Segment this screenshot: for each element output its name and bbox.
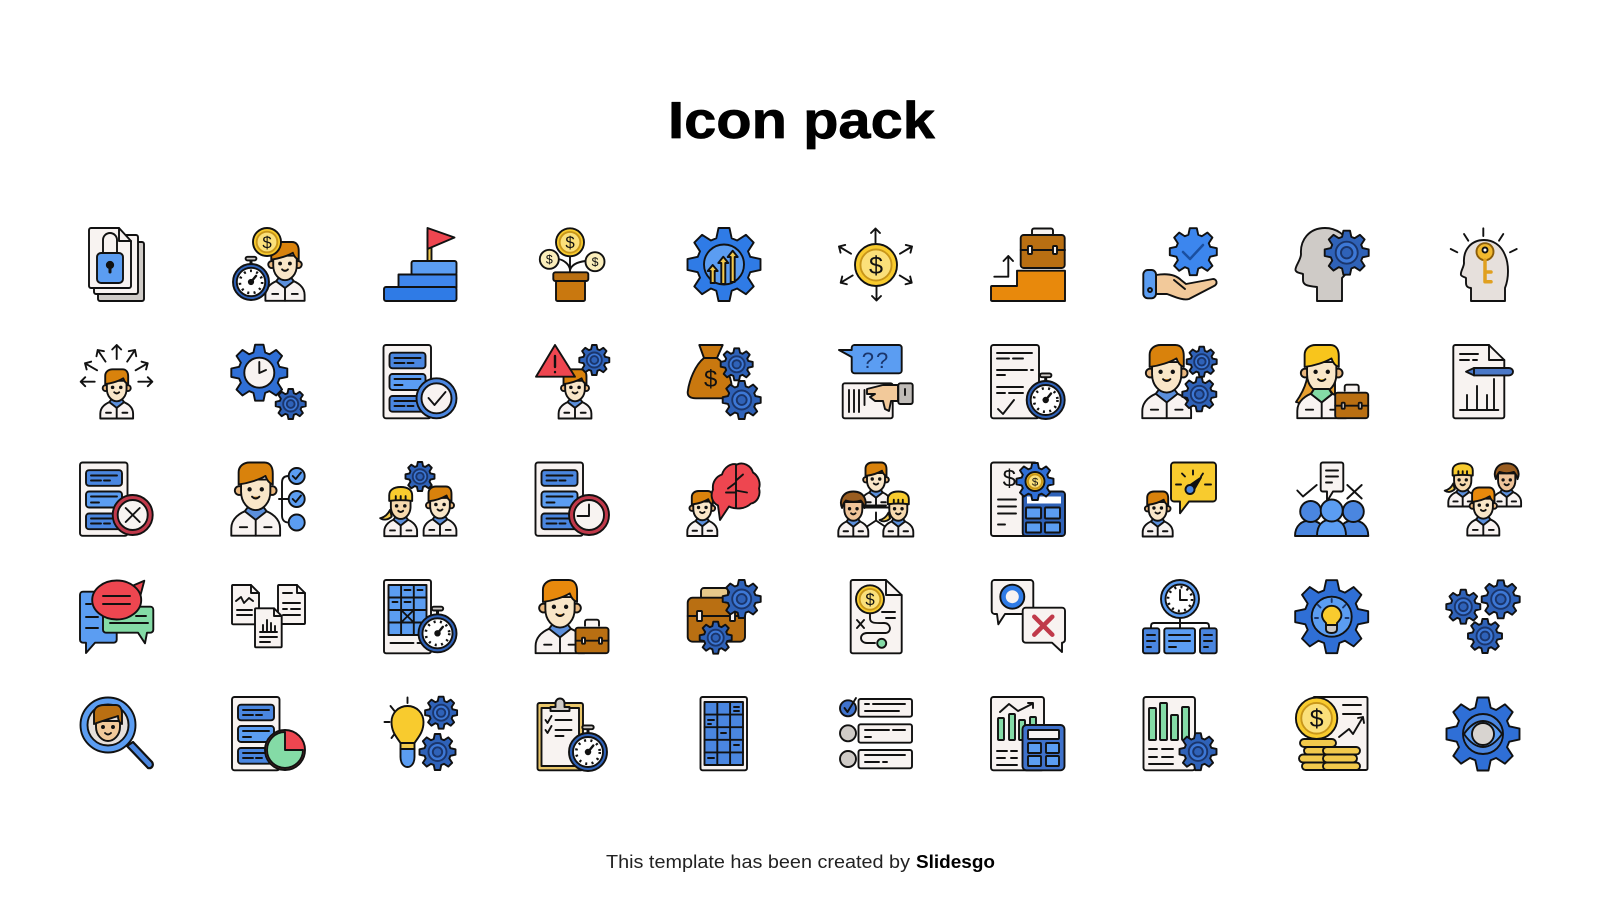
icon: group of three people [1445,463,1521,536]
icon: three connected people [838,462,913,536]
icon: question bubble and thumbs down [839,345,913,418]
icon: server with pie chart [232,697,305,770]
icon: money bag with gears [688,345,761,419]
icon: man with two gears [1142,345,1217,418]
icon: three documents [232,585,305,647]
icon: hand holding checked gear [1143,228,1217,299]
icon: server with clock [536,462,609,536]
icon: man with coin and stopwatch [233,228,305,301]
icon: document, dollar gear and calculator [991,462,1065,536]
icon: money plant in pot [540,228,604,301]
icon: man with checklist [231,462,305,536]
icon: checklist with options [840,698,912,768]
icon: warning man with gear [536,345,609,418]
icon: money bag with gears: $ [704,366,717,393]
icon: chart report with calculator [991,697,1064,770]
icon: briefcase with gears [688,580,761,654]
icon: clipboard with stopwatch [538,698,607,771]
icon: clock with organisation boxes [1143,580,1217,653]
icon: head with gear [1295,228,1369,301]
icon: team voting with document [1295,462,1368,536]
icon: server with check [384,345,456,418]
footer credit: Slidesgo [916,852,995,872]
icon: speech bubbles with circle and cross [992,580,1065,652]
icon: man with briefcase [536,580,608,653]
icon: locked documents [89,228,144,301]
icon: man with brain bubble [687,463,760,536]
icon: two people with gear [380,462,456,536]
icon: document with pen and bars [1453,345,1513,418]
icon: man with gauge bubble [1143,462,1216,536]
title: Icon pack [668,92,935,150]
icon: man with radiating arrows [81,345,152,418]
icon: schedule grid with stopwatch [384,580,456,653]
icon: question bubble and thumbs down: ?? [862,348,890,373]
icon: gear with light bulb [1295,580,1368,653]
icon: document with stopwatch [991,345,1065,419]
icon: bar chart report with gear [1144,697,1216,770]
icon: light bulb with gears [384,697,457,770]
icon: chat bubbles [80,580,153,653]
icon: head with key and rays [1451,228,1517,301]
icon: server with cross [80,462,153,536]
icon: coin with radiating arrows [837,228,914,300]
icon: briefcase on stairs [991,228,1065,301]
icon: gear with eye [1446,698,1520,770]
icon: calendar grid panel [700,697,747,770]
icon: gear with growth arrows [688,228,760,301]
icon: magnifier on a face [80,698,153,768]
icon: clock gear with small gear [231,345,306,419]
footer credit: This template has been created by [606,852,910,872]
icon: three gears [1446,580,1520,653]
icon: woman with briefcase [1296,345,1368,418]
icon: coins with financial report [1296,697,1368,770]
icon: stairs with flag [384,228,456,301]
icon: document, dollar gear and calculator: $ [1003,466,1016,492]
icon: document with coin and route [851,580,902,653]
